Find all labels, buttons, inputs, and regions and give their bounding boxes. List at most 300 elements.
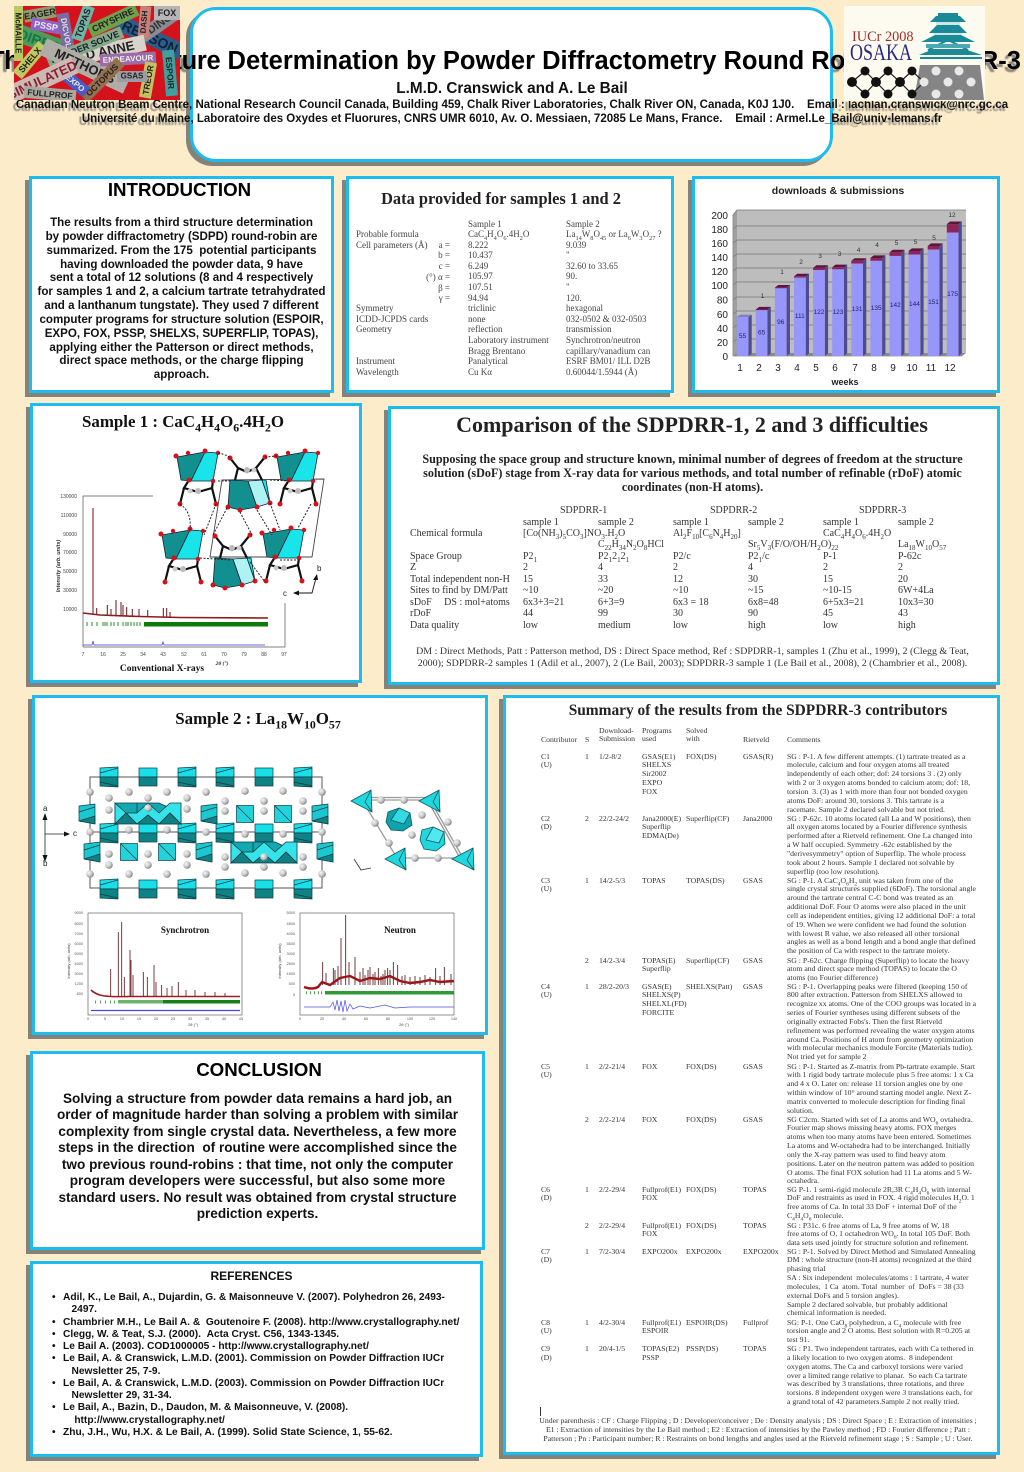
left logo: program name collage: TOPAS <box>73 7 93 39</box>
reference list: Zhu, J.H., Wu, H.X. & Le Bail, A. (1999). Solid State Science, 1, 55-62. <box>63 1427 392 1438</box>
introduction text <box>37 216 326 381</box>
comments column: recognize xx atoms. One of the COO groups was located in a <box>787 999 976 1008</box>
comparison row labels: Chemical formula <box>410 528 482 539</box>
x axis labels: 1 <box>737 363 743 374</box>
comparison row labels: Z <box>410 562 416 573</box>
reference list: Newsletter 25, 7-9. <box>71 1366 160 1376</box>
contributor column: C2 <box>541 814 550 823</box>
reference list: Le Bail, A. & Cranswick, L.M.D. (2001). Commission on Powder Diffraction IUCr <box>63 1353 444 1364</box>
y tick labels: 500 <box>289 982 295 986</box>
x tick labels: 30 <box>188 1017 192 1021</box>
column sdpdrr-2 sample 2: high <box>748 620 766 631</box>
difference curve <box>91 1010 240 1012</box>
comments column: octahedra. <box>787 1176 819 1185</box>
download value labels: 65 <box>758 330 766 336</box>
sample 1 column: 8.222 <box>468 240 488 250</box>
data heading: Data provided for samples 1 and 2 <box>381 189 621 208</box>
projected cell <box>362 798 463 858</box>
y axis title: Intensity (arb. units) <box>66 943 71 979</box>
submission value labels: 5 <box>932 235 936 242</box>
solved with column: FOX(DS) <box>686 1221 716 1230</box>
column sdpdrr-2 sample 1: 6x3 = 18 <box>673 597 709 608</box>
sample 2 column: capillary/vanadium can <box>566 346 650 356</box>
x tick labels: 140 <box>451 1017 457 1021</box>
reference bullets: • <box>52 1402 56 1413</box>
download submission column: 22/2-24/2 <box>599 814 629 823</box>
y tick labels: 5000 <box>287 911 295 915</box>
column sdpdrr-1 sample 2 <box>598 516 664 631</box>
programs column: ESPOIR <box>642 1326 669 1335</box>
column sdpdrr-3 sample 1: sample 1 <box>823 516 859 528</box>
y tick labels: 4000 <box>75 962 83 966</box>
y axis labels: 0 <box>722 352 728 363</box>
column sdpdrr-2 sample 1: Al2F10[C6N4H20] <box>673 528 741 541</box>
programs column: PSSP <box>642 1353 659 1362</box>
comments column: around Ca. Positions of H atom from geometry optimization <box>787 1035 973 1044</box>
reference bullets: • <box>52 1329 56 1340</box>
y tick labels: 6000 <box>75 942 83 946</box>
reference bullets: • <box>52 1341 56 1352</box>
left logo: program name collage: FOX <box>158 8 176 18</box>
comments column: SG : P1. Two independent tartrates, each with Ca tethered in <box>787 1344 974 1353</box>
conclusion text: order of magnitude harder than solving a problem with similar <box>57 1107 458 1122</box>
data labels column: Geometry <box>356 324 392 334</box>
x tick labels: 120 <box>429 1017 435 1021</box>
panel: references <box>30 1261 483 1457</box>
reference list <box>63 1292 459 1439</box>
column sdpdrr-3 sample 2: 10x3=30 <box>898 597 934 608</box>
lanthanum atoms <box>86 787 326 878</box>
header shadow text: Université du Maine, Laboratoire des Oxydes et Fluorures, CNRS UMR 6010, Av. O. Messiaen, 72085 Le Mans, France. Email : Armel.Le_Bail@univ-lemans.fr <box>79 116 939 128</box>
left logo: program name collage: GSAS <box>121 72 144 80</box>
table header programs: Programs <box>642 726 672 734</box>
text cursor mark <box>540 1407 541 1416</box>
sample column: 1 <box>585 1247 589 1256</box>
y axis labels: 200 <box>711 211 728 222</box>
summary heading: Summary of the results from the SDPDRR-3 contributors <box>569 702 947 719</box>
reference list: 2497. <box>71 1304 97 1315</box>
sample 1 column: 107.51 <box>468 282 493 292</box>
x axis labels <box>737 363 956 374</box>
data parameters column: (°) α = <box>426 272 450 282</box>
download value labels: 111 <box>795 313 805 320</box>
title: The Third Structure Determination by Powder Diffractometry Round Robin SDPDRR-3 <box>0 47 1021 75</box>
column sdpdrr-1 sample 2: 99 <box>598 608 608 619</box>
comments column: and 4 x O. Later on: release 11 torsion angles one by one <box>787 1079 963 1088</box>
comments column: oxygen atoms. The Ca and carboxyl torsions were varied <box>787 1362 963 1371</box>
column sdpdrr-2 sample 2: Sr5V3(F/O/OH/H2O)22 <box>748 539 838 552</box>
programs column: SHELXS(P) <box>642 990 681 999</box>
comments column: series of Fourier syntheses using different subsets of the <box>787 1008 960 1017</box>
sample 1 column: 105.97 <box>468 271 493 281</box>
column sdpdrr-1 sample 2: ~20 <box>598 585 613 596</box>
programs column: Fullprof(E1) <box>642 1221 681 1230</box>
comparison row labels: Total independent non-H <box>410 574 510 585</box>
comparison footnote: 2000); SDPDRR-2 samples 1 (Adil et al., 2007), 2 (Le Bail, 2003); SDPDRR-3 sample 1 (Le Bail et al., 2008), 2 (Chambrier et al., 2008). <box>418 658 967 669</box>
x tick labels: 61 <box>201 652 207 658</box>
programs column: EDMA(De) <box>642 831 679 840</box>
table header S: S <box>585 735 589 744</box>
comments column: torsion angle and 2 O atoms. Best solution with R=0.205 at <box>787 1326 970 1335</box>
column sdpdrr-1 sample 2: sample 2 <box>598 516 634 528</box>
osaka text: OSAKA <box>850 40 912 65</box>
reference list: Le Bail A. (2003). COD1000005 - http://www.crystallography.net/ <box>63 1341 369 1352</box>
comments column: "derivesymmetry" option of Superflip. The whole process <box>787 849 966 858</box>
left logo: program name collage: REASON <box>119 17 180 57</box>
sample column: 1 <box>585 1318 589 1327</box>
plot box <box>300 913 454 1015</box>
comparison subtitle: coordinates (non-H atoms). <box>622 480 763 494</box>
programs column: Fullprof(E1) <box>642 1318 681 1327</box>
left logo: program name collage: DICVOL <box>59 17 73 49</box>
column sdpdrr-1 sample 1: [Co(NH3)5CO3]NO3.H2O <box>523 528 625 541</box>
conclusion text: complexity from single crystal data. Nevertheless, a few more <box>58 1124 457 1139</box>
sample 2 column <box>566 218 662 377</box>
column sdpdrr-2 sample 1: P2/c <box>673 551 691 562</box>
column sdpdrr-2 sample 1: ~10 <box>673 585 688 596</box>
x tick labels: 25 <box>171 1017 175 1021</box>
x tick labels: 52 <box>181 652 187 658</box>
right logo: IUCr 2008 Osaka <box>844 6 985 101</box>
download value labels: 123 <box>833 309 844 316</box>
x tick labels: 79 <box>241 652 247 658</box>
x axis labels: 10 <box>906 363 918 374</box>
difference curve <box>304 1000 454 1012</box>
header panel <box>190 7 833 162</box>
contributor column: C7 <box>541 1247 550 1256</box>
comments column: independently of each other; dof: 24 torsions 3 . (2) only <box>787 769 962 778</box>
y tick labels: 4500 <box>287 922 295 926</box>
x tick labels: 40 <box>342 1017 346 1021</box>
submission value labels: 1 <box>780 269 784 276</box>
y axis labels: 160 <box>711 239 728 250</box>
data parameters column <box>426 240 450 303</box>
peaks <box>111 922 225 997</box>
y tick labels <box>60 494 77 613</box>
comments column: a likely location to two oxygen atoms. 8 independent <box>787 1353 952 1362</box>
panel: sample 2 <box>32 695 488 1035</box>
x tick labels <box>299 1017 457 1021</box>
download submission column: 7/2-30/4 <box>599 1247 625 1256</box>
sample column: 2 <box>585 956 589 965</box>
contributor column: (U) <box>541 990 552 999</box>
data parameters column: c = <box>439 261 450 271</box>
x tick labels: 34 <box>140 652 146 658</box>
sample column: 2 <box>585 814 589 823</box>
panel: introduction <box>29 176 334 393</box>
x tick labels: 45 <box>239 1017 243 1021</box>
rietveld column: GSAS <box>743 956 763 965</box>
comparison subtitle <box>422 452 963 494</box>
column sdpdrr-2 sample 2: ~15 <box>748 585 763 596</box>
column sdpdrr-2 sample 1: 30 <box>673 608 683 619</box>
comments column: racemate. Sample 2 declared solvable but not tried. <box>787 805 945 814</box>
hydrogen bonds <box>180 453 311 582</box>
sample 1 column: CaC4H4O6.4H2O <box>468 229 529 242</box>
label c: c <box>73 829 77 838</box>
comments column: additional DoF. Four O atoms were also placed in the unit <box>787 902 966 911</box>
y tick labels: 30000 <box>63 588 77 594</box>
x tick labels <box>82 652 287 658</box>
programs column: FOX <box>642 1193 657 1202</box>
programs column: EXPO <box>642 778 662 787</box>
x axis labels: 6 <box>832 363 838 374</box>
comparison footnote: DM : Direct Methods, Patt : Patterson method, DS : Direct Space method, Ref : SDPDRR-1, samples 1 (Zhu et al., 1999), 2 (Clegg & Teat, <box>416 646 969 657</box>
rietveld column: GSAS <box>743 1062 763 1071</box>
column sdpdrr-3 sample 1: ~10-15 <box>823 585 852 596</box>
contributor column: C8 <box>541 1318 550 1327</box>
programs column: FOX <box>642 1062 657 1071</box>
solved with column: ESPOIR(DS) <box>686 1318 728 1327</box>
introduction text: applying either the Patterson or direct methods, <box>49 341 314 354</box>
download value labels: 175 <box>947 291 958 298</box>
sample 2 column: Synchrotron/neutron <box>566 335 640 345</box>
sample 2 column: " <box>566 282 570 292</box>
programs column: FORCITE <box>642 1008 674 1017</box>
column sdpdrr-1 sample 1 <box>523 516 625 631</box>
left logo: program name collage: DASH <box>139 10 149 34</box>
isolated octahedra <box>79 804 333 862</box>
upper octahedra row <box>100 767 312 787</box>
sample column: 1 <box>585 1344 589 1353</box>
comments column: a grand total of 42 parameters.Sample 2 not really tried. <box>787 1397 960 1406</box>
data parameters column: β = <box>438 283 450 293</box>
column sdpdrr-2 sample 2: 90 <box>748 608 758 619</box>
column sdpdrr-1 sample 2: 33 <box>598 574 608 585</box>
y tick labels: 1500 <box>287 972 295 976</box>
sample 2 heading: Sample 2 : La18W10O57 <box>175 709 341 731</box>
conclusion text: two previous round-robins : that time, not only the computer <box>62 1157 453 1172</box>
programs column: FOX <box>642 1115 657 1124</box>
sample 2 column: Sample 2 <box>566 218 600 228</box>
projected axes <box>354 859 371 870</box>
reference bullets: • <box>52 1427 56 1438</box>
contributor column: (U) <box>541 1070 552 1079</box>
polyhedra <box>158 448 320 590</box>
sample 1 column: Cu Kα <box>468 367 492 377</box>
submission value labels: 5 <box>914 239 918 246</box>
table header solved: Solved <box>686 726 707 734</box>
left logo: program name collage <box>14 6 180 100</box>
sample 2 column: 120. <box>566 293 582 303</box>
comments column: superflip (too low resolution). <box>787 867 880 876</box>
comments column: atoms (no Fourier difference) <box>787 973 878 982</box>
column sdpdrr-2 sample 2: 30 <box>748 574 758 585</box>
middle octahedra row <box>100 823 312 843</box>
column sdpdrr-3 sample 2: sample 2 <box>898 516 934 528</box>
peaks <box>323 915 451 985</box>
download submission column: 2/2-29/4 <box>599 1185 625 1194</box>
x tick labels: 97 <box>281 652 287 658</box>
x axis title: 2θ (°) <box>215 660 229 667</box>
comments column: chemical information is needed. <box>787 1308 886 1317</box>
contributor column: (D) <box>541 1255 552 1264</box>
column sdpdrr-1 sample 1: P21 <box>523 551 537 564</box>
table header solved <box>686 726 708 743</box>
x axis labels: 12 <box>944 363 956 374</box>
programs column: SHELXS <box>642 760 671 769</box>
baseline trace <box>83 613 268 618</box>
y axis labels: 180 <box>711 225 728 236</box>
y tick labels: 70000 <box>63 550 77 556</box>
y tick labels: 0 <box>293 993 295 997</box>
table header comments: Comments <box>787 735 820 744</box>
column sdpdrr-3 sample 2: 6W+4La <box>898 585 934 596</box>
programs column: GSAS(E) <box>642 982 672 991</box>
y tick labels: 3000 <box>287 952 295 956</box>
x axis title: 2θ (°) <box>188 1022 199 1027</box>
x tick labels: 80 <box>386 1017 390 1021</box>
download submission column: 20/4-1/5 <box>599 1344 625 1353</box>
conclusion text: prediction experts. <box>197 1206 318 1221</box>
y axis labels: 60 <box>717 310 728 321</box>
column sdpdrr-2 sample 1: sample 1 <box>673 516 709 528</box>
reference bullets: • <box>52 1292 56 1303</box>
column sdpdrr-1 sample 1: sample 1 <box>523 516 559 528</box>
x tick labels: 43 <box>160 652 166 658</box>
header shadow text: Canadian Neutron Beam Centre, National Research Council Canada, Building 459, Chalk River Laboratories, Chalk River ON, Canada, K0J 1J0. Email : lachlan.cranswick@nrc.gc.ca <box>13 102 1005 114</box>
column sdpdrr-3 sample 2: P-62c <box>898 551 921 562</box>
sample 1 column: Panalytical <box>468 356 508 366</box>
comparison row labels: sDoF DS : mol+atoms <box>410 597 510 608</box>
x tick labels: 7 <box>82 652 85 658</box>
column sdpdrr-1 sample 1: low <box>523 620 538 631</box>
introduction text: approach. <box>154 368 209 381</box>
data parameters column: γ = <box>439 293 450 303</box>
column sdpdrr-2 sample 2: 6x8=48 <box>748 597 779 608</box>
submission value labels: 12 <box>948 212 956 219</box>
reflection ticks <box>87 622 268 626</box>
column sdpdrr-2 sample 2: P21/c <box>748 551 769 564</box>
introduction text: direct space methods, or the charge flipping <box>59 354 304 367</box>
column sdpdrr-3 sample 2: high <box>898 620 916 631</box>
comments column: within window of 10° around starting model angle. Next Z- <box>787 1088 971 1097</box>
column sdpdrr-3 sample 1: 2 <box>823 562 828 573</box>
comments column: Sample 2 declared solvable, but probably additional <box>787 1300 948 1309</box>
sample column: 1 <box>585 982 589 991</box>
comments column: with molecular mechanics module Forcite (Materials tudio). <box>787 1043 973 1052</box>
comments column: C4H4O6 molecule. <box>787 1211 844 1223</box>
comments column: around the tartrate central C-C bond was treated as an <box>787 893 953 902</box>
comparison row labels: Data quality <box>410 620 459 631</box>
summary footnote <box>539 1416 977 1443</box>
x axis title: 2θ (°) <box>399 1022 410 1027</box>
sample 2 column: transmission <box>566 324 612 334</box>
submission value labels: 5 <box>895 240 899 247</box>
y axis labels: 40 <box>717 324 728 335</box>
introduction heading: INTRODUCTION <box>108 179 251 200</box>
column sdpdrr-3 sample 1 <box>823 516 891 631</box>
reference bullets: • <box>52 1378 56 1389</box>
y axis labels <box>711 211 728 363</box>
submission value labels <box>761 212 956 300</box>
comparison group headings: SDPDRR-3 <box>859 504 906 516</box>
programs column: Superflip <box>642 964 671 973</box>
sample 2 column: hexagonal <box>566 303 603 313</box>
comments column: free atoms of Ca. In total 33 DoF + internal DoF of the <box>787 1202 957 1211</box>
y tick labels: 4000 <box>287 932 295 936</box>
comments column: torsion 3. (3) as 1 with more than four not bonded oxygen <box>787 787 968 796</box>
x tick labels: 25 <box>120 652 126 658</box>
rietveld column <box>743 752 779 1353</box>
column sdpdrr-1 sample 1: ~10 <box>523 585 538 596</box>
programs column: TOPAS(E2) <box>642 1344 679 1353</box>
left logo: program name collage: EAGER <box>23 6 57 22</box>
conclusion text: standard users. No result was obtained from crystal structure <box>58 1190 457 1205</box>
programs column: EXPO200x <box>642 1247 678 1256</box>
comparison footnote <box>416 646 969 669</box>
axes arrows <box>297 578 316 593</box>
contributor column: C9 <box>541 1344 550 1353</box>
column sdpdrr-2 sample 1: 12 <box>673 574 683 585</box>
sample 1 column: 6.249 <box>468 261 488 271</box>
solved with column: FOX(DS) <box>686 752 716 761</box>
table header download <box>599 726 635 743</box>
comments column: took about 2 hours. Sample 1 declared not solvable by <box>787 858 955 867</box>
sample 1 column: Sample 1 <box>468 218 502 228</box>
synchrotron label: Synchrotron <box>161 925 209 935</box>
comments column: data sets used jointly for structure solution and refinement. <box>787 1238 969 1247</box>
x axis labels: 11 <box>926 363 937 374</box>
solved with column: Superflip(CF) <box>686 956 729 965</box>
contributor column: (U) <box>541 884 552 893</box>
affiliation France: Université du Maine, Laboratoire des Oxydes et Fluorures, CNRS UMR 6010, Av. O. Messiaen, 72085 Le Mans, France. Email : Armel.Le_Bail@univ-lemans.fr <box>82 113 942 125</box>
y tick labels: 3500 <box>287 942 295 946</box>
conclusion text: steps in the direction of routine were accomplished since the <box>58 1140 457 1155</box>
axes arrowheads <box>293 574 318 596</box>
y tick labels: 5000 <box>75 952 83 956</box>
header text <box>0 47 1021 125</box>
programs column: GSAS(E1) <box>642 752 675 761</box>
projected triangles <box>351 790 474 870</box>
programs column: FOX <box>642 1229 657 1238</box>
download submission column <box>599 752 629 1353</box>
comparison row labels: Sites to find by DM/Patt <box>410 585 508 596</box>
y tick labels <box>287 911 295 997</box>
y axis labels: 100 <box>711 281 728 292</box>
solved with column: Superflip(CF) <box>686 814 729 823</box>
download value labels: 96 <box>777 319 785 326</box>
column sdpdrr-2 sample 2: sample 2 <box>748 516 784 528</box>
comments column: atom and direct space method (TOPAS) to locate the O <box>787 964 957 973</box>
authors: L.M.D. Cranswick and A. Le Bail <box>396 80 628 97</box>
neutron plot <box>277 911 457 1027</box>
rietveld column: TOPAS <box>743 1344 767 1353</box>
rietveld column: EXPO200x <box>743 1247 779 1256</box>
column sdpdrr-1 sample 2: 6+3=9 <box>598 597 624 608</box>
reference list: Le Bail, A. & Cranswick, L.M.D. (2003). Commission on Powder Diffraction IUCr <box>63 1378 444 1389</box>
sample column: 2 <box>585 1115 589 1124</box>
programs column: FOX <box>642 787 657 796</box>
y tick labels: 50000 <box>63 569 77 575</box>
download value labels: 122 <box>813 309 825 316</box>
column sdpdrr-3 sample 1: 45 <box>823 608 833 619</box>
sample 2 column: La14W8O45 or La6W3O27 ? <box>566 229 662 242</box>
summary footnote: E1 : Extraction of intensities by the Le Bail method ; E2 : Extraction of intensities by the Pawley method ; FD : Fourier difference ; Patt : <box>546 1425 970 1434</box>
x tick labels: 60 <box>364 1017 368 1021</box>
rietveld column: GSAS(R) <box>743 752 773 761</box>
download submission column: 4/2-30/4 <box>599 1318 625 1327</box>
solved with column: PSSP(DS) <box>686 1344 718 1353</box>
x tick labels: 10 <box>120 1017 124 1021</box>
download value labels: 135 <box>871 305 882 312</box>
label b: b <box>317 564 322 573</box>
data parameters column: a = <box>439 240 450 250</box>
introduction text: summarized. From the 175 potential participants <box>47 244 316 257</box>
summary footnote: Patterson ; Pn : Participant number; R : Restraints on bond lengths and angles used at the Rietveld refinement stage ; S : Sample ; U : User. <box>543 1434 973 1443</box>
comments column: cell as independent entities, giving 12 additional DoF: a total <box>787 911 975 920</box>
panel: summary of results <box>503 695 1000 1455</box>
